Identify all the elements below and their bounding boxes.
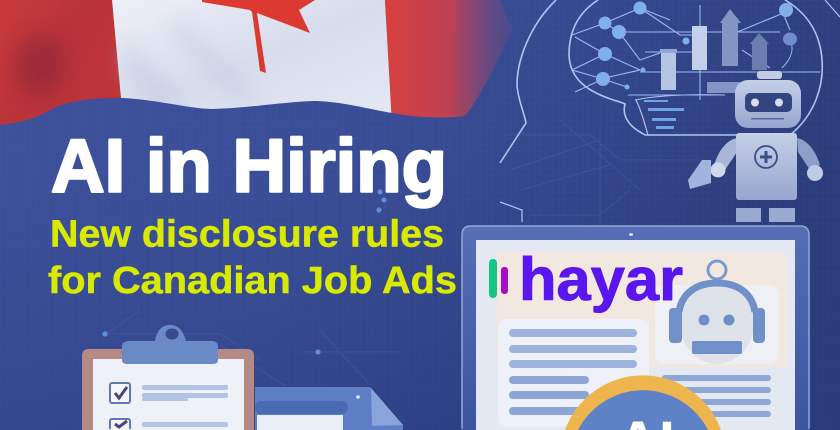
title: AI in Hiring	[51, 124, 447, 208]
job ad panel	[498, 319, 649, 427]
laptop bezel edge	[462, 226, 809, 429]
robot arms	[714, 138, 737, 170]
folder	[255, 387, 403, 430]
robot feet	[736, 208, 761, 222]
chart bar 4	[750, 33, 769, 70]
subtitle line 1: New disclosure rules	[50, 214, 444, 256]
laptop screen	[476, 240, 795, 430]
clipboard paper	[93, 359, 244, 430]
flag of Canada	[0, 0, 515, 130]
folder tab	[255, 401, 348, 414]
network links	[572, 5, 820, 100]
flag: white band shadows	[112, 28, 244, 102]
flag: maple leaf	[202, 0, 315, 73]
clipboard	[82, 325, 254, 430]
small data lines	[644, 100, 684, 129]
folder corner fold	[371, 388, 403, 426]
laptop	[462, 226, 809, 430]
robot visor	[745, 93, 792, 112]
checklist lines 1	[142, 385, 228, 401]
robot	[688, 71, 823, 222]
AI magnifier badge	[565, 375, 721, 430]
robot avatar	[669, 261, 765, 364]
head outline	[500, 0, 556, 163]
checkbox 1	[110, 383, 130, 403]
laptop bezel	[462, 226, 809, 430]
folder paper	[257, 415, 343, 430]
flag: white band	[112, 0, 392, 120]
clipboard board	[82, 349, 254, 430]
robot body	[736, 133, 797, 200]
network nodes	[596, 2, 797, 90]
head back and jaw lines	[500, 0, 840, 222]
clipboard clip	[122, 325, 218, 364]
candlestick chart	[660, 9, 769, 93]
check mark 2	[115, 421, 127, 427]
flag: left red band	[0, 0, 125, 130]
circuit background lines	[102, 120, 700, 395]
folder back	[255, 387, 403, 430]
head and brain network	[500, 0, 840, 222]
flag: right red band	[385, 0, 515, 125]
robot avatar panel	[655, 285, 779, 364]
robot head	[735, 80, 801, 128]
chart bar 3	[720, 9, 741, 66]
subtitle line 2: for Canadian Job Ads	[48, 260, 457, 302]
brain outline	[569, 0, 822, 135]
peach panel	[497, 252, 787, 367]
robot antenna	[757, 71, 782, 79]
chart bar 1	[661, 53, 676, 90]
job ad text lines	[509, 329, 771, 417]
checklist lines 2	[142, 422, 228, 427]
chart base	[707, 82, 740, 93]
laptop camera	[629, 233, 633, 236]
checkbox 2	[110, 419, 130, 429]
chart bar 2	[692, 26, 707, 70]
hayar logo: hayar	[519, 246, 683, 313]
